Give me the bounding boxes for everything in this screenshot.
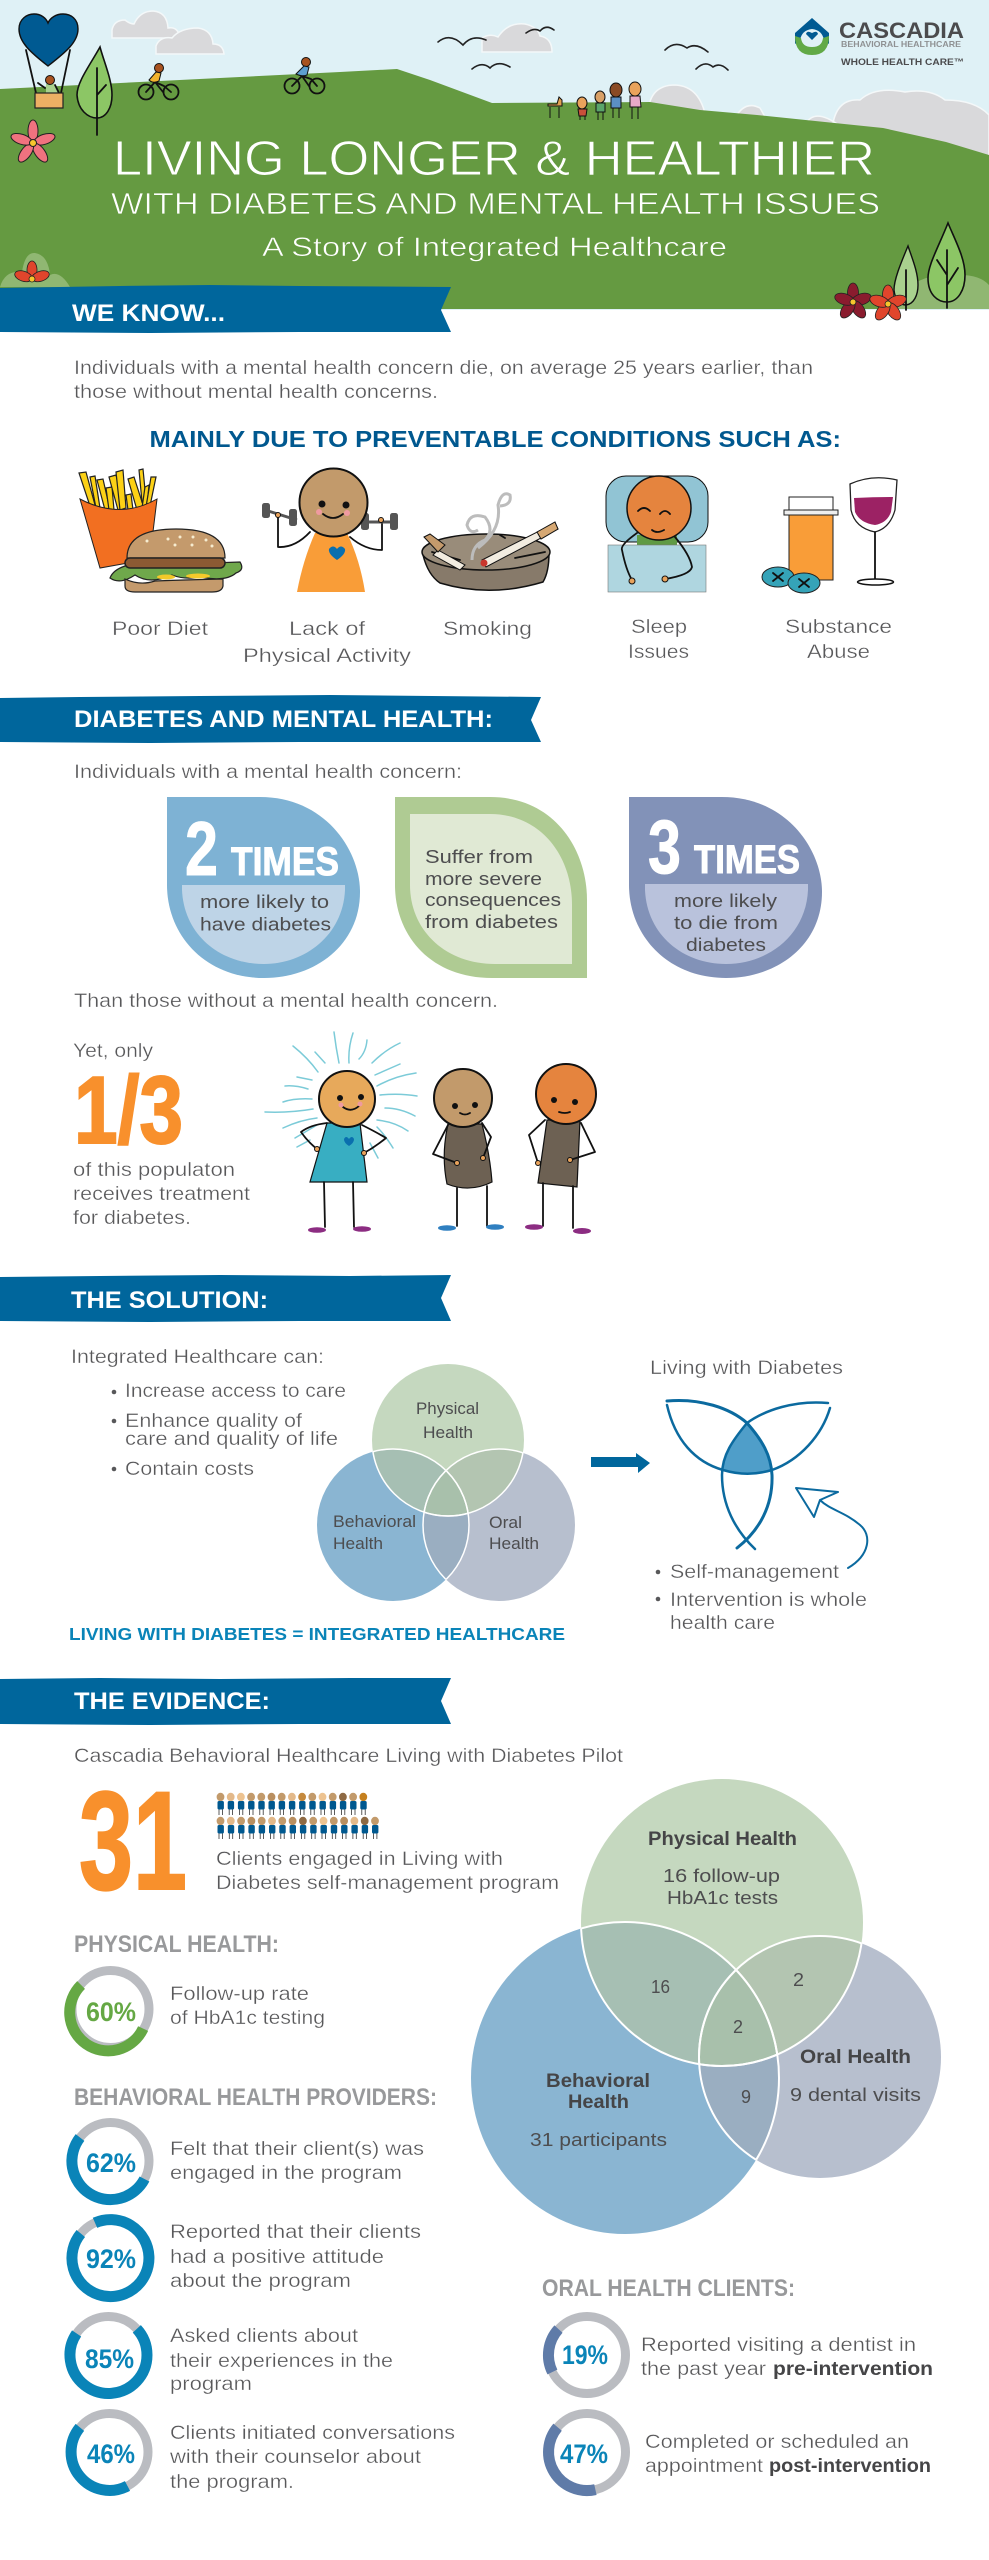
callout: severe consequences: more severe [425, 869, 542, 889]
stat: 85 percent [70, 2316, 393, 2395]
logo [795, 18, 964, 68]
logo: BEHAVIORAL HEALTHCARE [841, 39, 961, 49]
callout: 3 times: more likely [674, 891, 777, 911]
icon: pink flower [10, 120, 56, 165]
title [111, 132, 880, 262]
stat: 19 percent [548, 2316, 933, 2394]
icon: person sleeping [606, 476, 708, 592]
text: pilot: Cascadia Behavioral Healthcare Living with Diabetes Pilot [74, 1745, 624, 1767]
stat: 47 percent: appointment [645, 2455, 764, 2477]
callout: 2 times: have diabetes [200, 914, 331, 934]
venn diagram: evidence: 16 [651, 1977, 670, 1997]
stat: one third: 1/3 [74, 1057, 183, 1164]
banner: the solution [0, 1275, 451, 1322]
stat: 60 percent: 60% [86, 1997, 136, 2027]
green hill [0, 69, 989, 309]
venn diagram: evidence: 9 dental visits [790, 2085, 921, 2105]
venn diagram: integrated healthcare: Health [333, 1534, 383, 1553]
bottom right bush [880, 275, 989, 309]
venn diagram: evidence [471, 1779, 941, 2234]
venn diagram: evidence: Oral Health [800, 2047, 911, 2068]
icon: third person [525, 1064, 596, 1234]
stat: 31 clients: 31 [79, 1762, 187, 1919]
logo: CASCADIA [839, 18, 964, 43]
stat: 46 percent: with their counselor about [169, 2446, 422, 2468]
pictogram: 31 people [217, 1793, 379, 1839]
venn diagram: evidence: 9 [741, 2087, 751, 2107]
venn diagram: evidence: 16 follow-up [663, 1866, 780, 1886]
stat: one third [73, 1040, 251, 1229]
stat: 46 percent: the program. [170, 2471, 294, 2493]
icon: red flower [868, 285, 908, 323]
birds [438, 27, 728, 70]
venn diagram: integrated healthcare: Oral [489, 1513, 522, 1532]
stat: 62 percent: 62% [86, 2148, 136, 2178]
text: than those: Than those without a mental health concern. [74, 990, 498, 1012]
callout: severe consequences: from diabetes [425, 912, 558, 932]
list: integrated healthcare benefits: Integrated Healthcare can: [71, 1346, 324, 1368]
icon: partial flower bottom left [13, 261, 51, 284]
icon: trefoil [667, 1400, 830, 1549]
list: living with diabetes points: health care [670, 1612, 775, 1634]
title: A Story of Integrated Healthcare [262, 232, 727, 262]
banner: the evidence: THE EVIDENCE: [74, 1688, 270, 1715]
stat: 31 clients: Clients engaged in Living with [216, 1848, 503, 1870]
icon: cyclist two [284, 58, 324, 94]
icon: large tree bottom right [928, 223, 965, 308]
text: intro: Individuals with a mental health concern die, on average 25 years earlier, than [74, 357, 813, 379]
clouds [112, 11, 989, 160]
stat: 92 percent: 92% [86, 2244, 136, 2274]
stat: 85 percent: Asked clients about [170, 2325, 359, 2347]
venn diagram: evidence: Behavioral [546, 2071, 650, 2092]
stat: 92 percent [72, 2220, 421, 2297]
stat: 92 percent: Reported that their clients [170, 2221, 421, 2243]
labels: conditions: Abuse [807, 641, 870, 663]
venn diagram: evidence: 2 [733, 2017, 743, 2037]
labels: conditions: Issues [628, 641, 689, 663]
venn diagram: integrated healthcare: Behavioral [333, 1512, 416, 1531]
banner: we know: WE KNOW... [72, 300, 225, 327]
labels: conditions: Lack of [289, 618, 366, 640]
list: living with diabetes points [656, 1561, 867, 1634]
list: living with diabetes points: Self-management [670, 1561, 840, 1583]
venn diagram: evidence: Health [568, 2092, 629, 2113]
logo: WHOLE HEALTH CARE™ [841, 57, 964, 68]
icon: second person [433, 1069, 504, 1231]
venn diagram: evidence: 31 participants [530, 2130, 667, 2150]
callout: severe consequences [395, 797, 587, 978]
icon: cyclist one [138, 64, 178, 100]
stat: 46 percent: Clients initiated conversations [170, 2422, 455, 2444]
icon: dark flower [833, 283, 873, 321]
stat: 60 percent [70, 1970, 325, 2051]
venn diagram: integrated healthcare: Physical [416, 1399, 479, 1418]
stat: 85 percent: their experiences in the [170, 2350, 393, 2372]
stat: 62 percent: engaged in the program [170, 2162, 402, 2184]
stat: one third: receives treatment [73, 1183, 251, 1205]
title: LIVING LONGER & HEALTHIER [113, 132, 875, 186]
stat: 60 percent: of HbA1c testing [170, 2007, 325, 2029]
callout: 2 times: more likely to [200, 892, 329, 912]
banner: the evidence [0, 1678, 451, 1725]
title: WITH DIABETES AND MENTAL HEALTH ISSUES [111, 186, 880, 221]
labels: conditions [112, 616, 892, 667]
callout: 3 times: TIMES [694, 838, 800, 882]
icon: fries and burger [79, 469, 242, 592]
stat: 62 percent: Felt that their client(s) was [170, 2138, 424, 2160]
stat: 31 clients: Diabetes self-management program [216, 1872, 559, 1894]
icon: healthy person with rays [265, 1032, 417, 1233]
list: integrated healthcare benefits: Contain costs [125, 1458, 254, 1480]
stat: 60 percent: Follow-up rate [170, 1983, 309, 2005]
list: integrated healthcare benefits [71, 1346, 346, 1480]
labels: conditions: Sleep [631, 616, 687, 638]
stat: 19 percent: the past year [641, 2358, 767, 2380]
heading: behavioral health providers: BEHAVIORAL HEALTH PROVIDERS: [74, 2084, 437, 2111]
tagline: LIVING WITH DIABETES = INTEGRATED HEALTHCARE [69, 1624, 565, 1644]
stat: 46 percent [71, 2414, 455, 2493]
stat: 62 percent [72, 2122, 424, 2200]
stat: one third: of this populaton [73, 1159, 235, 1181]
stat: 47 percent [548, 2414, 931, 2491]
stat: one third: for diabetes. [73, 1207, 191, 1229]
stat: 19 percent: Reported visiting a dentist in [641, 2334, 916, 2356]
stat: 85 percent: program [170, 2373, 252, 2395]
venn diagram: evidence: Physical Health [648, 1829, 797, 1850]
stat: 19 percent: 19% [562, 2340, 608, 2370]
callout: 2 times [167, 797, 360, 978]
list: integrated healthcare benefits: Increase access to care [125, 1380, 346, 1402]
venn diagram: integrated healthcare: Health [423, 1423, 473, 1442]
icon: small tree bottom right [894, 246, 918, 310]
callout: severe consequences: consequences [425, 890, 561, 910]
callout: 2 times: TIMES [231, 840, 339, 884]
callout: 3 times: to die from [674, 913, 778, 933]
labels: conditions: Poor Diet [112, 618, 209, 640]
callout: 3 times: diabetes [686, 935, 766, 955]
stat: 92 percent: about the program [170, 2270, 351, 2292]
venn diagram: evidence: HbA1c tests [667, 1888, 778, 1908]
banner: the solution: THE SOLUTION: [71, 1287, 268, 1314]
text: intro: those without mental health concerns. [74, 381, 438, 403]
banner: diabetes and mental health [0, 695, 541, 743]
heading: oral health clients: ORAL HEALTH CLIENTS: [542, 2275, 795, 2302]
callout: 3 times [629, 797, 822, 978]
icon: ashtray with cigarettes [422, 494, 558, 590]
icon: tree [77, 47, 112, 135]
heading: physical health: PHYSICAL HEALTH: [74, 1931, 279, 1958]
header illustration panel [0, 0, 989, 323]
banner: we know [0, 285, 451, 333]
stat: 19 percent: pre-intervention [773, 2358, 933, 2380]
stat: 47 percent: Completed or scheduled an [645, 2431, 909, 2453]
venn diagram: evidence: 2 [793, 1970, 804, 1990]
labels: conditions: Smoking [443, 618, 532, 640]
list: integrated healthcare benefits: Enhance quality of [125, 1410, 303, 1432]
stat: 47 percent: post-intervention [769, 2455, 931, 2477]
stat: 47 percent: 47% [560, 2439, 608, 2469]
venn diagram: integrated healthcare: Health [489, 1534, 539, 1553]
text: intro [74, 357, 813, 403]
arrow: to living with diabetes [591, 1453, 650, 1473]
icon: person with dumbbells [262, 468, 398, 592]
stat: 85 percent: 85% [85, 2344, 134, 2374]
stat: 46 percent: 46% [87, 2439, 135, 2469]
stat: 31 clients [79, 1762, 559, 1919]
icon: pill bottle, pills, wine glass [762, 478, 897, 593]
heading: preventable conditions: MAINLY DUE TO PREVENTABLE CONDITIONS SUCH AS: [150, 426, 841, 452]
icon: family with dog [548, 82, 641, 120]
text: individuals: Individuals with a mental health concern: [74, 761, 462, 783]
icon: heart hot-air balloon [19, 14, 78, 108]
callout: 2 times: 2 [185, 807, 218, 892]
banner: diabetes and mental health: DIABETES AND MENTAL HEALTH: [74, 706, 493, 733]
callout: severe consequences: Suffer from [425, 847, 533, 867]
list: living with diabetes points: Intervention is whole [670, 1589, 867, 1611]
callout: 3 times: 3 [648, 805, 681, 890]
stat: 92 percent: had a positive attitude [170, 2246, 384, 2268]
arrow: curved hand-drawn [796, 1488, 867, 1568]
venn diagram: integrated healthcare [317, 1364, 575, 1601]
list: integrated healthcare benefits: care and quality of life [125, 1428, 338, 1450]
labels: conditions: Physical Activity [243, 645, 411, 667]
stat: one third: Yet, only [73, 1040, 153, 1062]
labels: conditions: Substance [785, 616, 892, 638]
text: living with diabetes: Living with Diabetes [650, 1357, 843, 1379]
bottom left bush [0, 253, 70, 287]
